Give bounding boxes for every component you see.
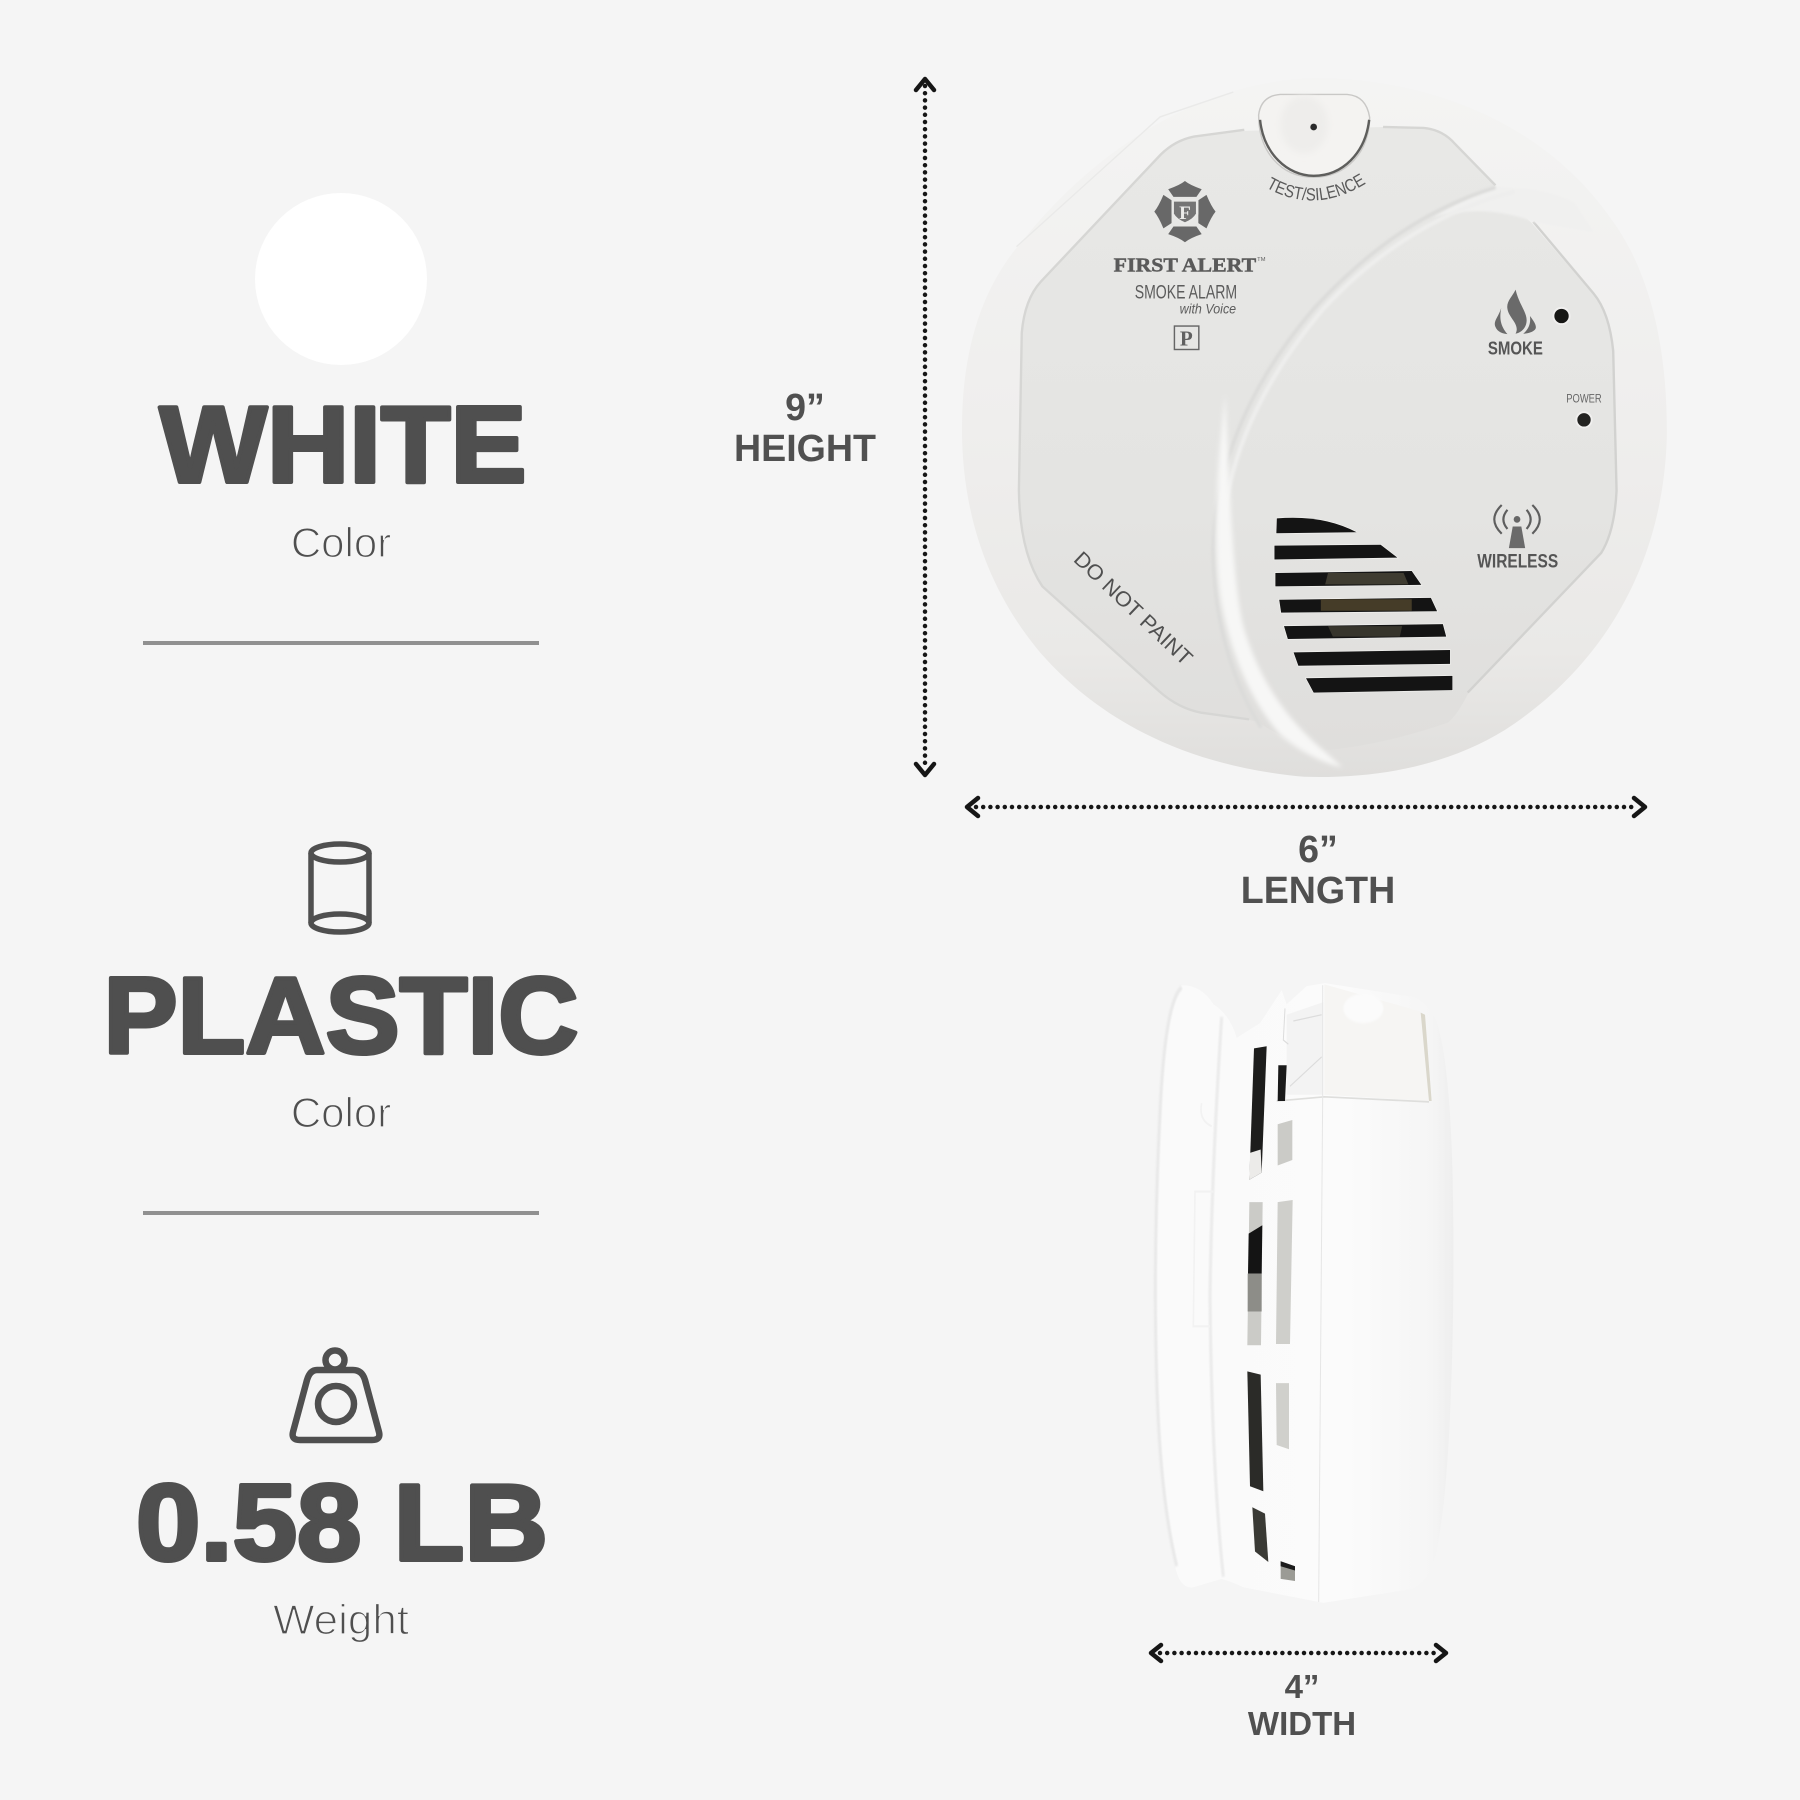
flange groove [1210, 1017, 1223, 1577]
side body silhouette [1153, 983, 1453, 1603]
panel: material spec [104, 844, 578, 1215]
dimension: length [967, 798, 1645, 911]
label: smoke: SMOKE [1488, 339, 1543, 359]
indicator: power led [1576, 412, 1592, 427]
label: color: Color [291, 1089, 391, 1136]
with voice: with Voice [1180, 302, 1236, 317]
button metal ring [1260, 120, 1369, 176]
icon: weight [293, 1350, 379, 1440]
flange tab [1193, 1103, 1213, 1326]
icon: flame [1495, 290, 1536, 334]
rim parting line [1017, 92, 1233, 247]
indicator: smoke led [1553, 308, 1570, 324]
plate groove: left [1019, 130, 1249, 719]
product name: SMOKE ALARM [1135, 282, 1237, 303]
heading: plastic: PLASTIC [104, 955, 578, 1077]
label: wireless: WIRELESS [1477, 552, 1558, 573]
button dot [1310, 124, 1317, 130]
label: power: POWER [1566, 392, 1602, 406]
label: length: LENGTH [1241, 869, 1395, 911]
heading: weight value: 0.58 LB [136, 1462, 548, 1584]
label: width: WIDTH [1248, 1705, 1356, 1742]
icon: wireless [1494, 505, 1540, 548]
certification mark: P [1180, 327, 1193, 351]
alarm outer housing [962, 78, 1667, 777]
top right rim wedge [1433, 186, 1594, 232]
label: height value: 9” [785, 386, 825, 428]
vent openings [1247, 1046, 1295, 1581]
top button block [1324, 984, 1429, 1101]
swoosh ridge highlight: upper [1224, 192, 1515, 519]
label: color: Color [291, 519, 391, 566]
panel: weight spec [136, 1350, 548, 1643]
main face plate [1020, 127, 1616, 751]
block shadow line [1277, 1097, 1429, 1102]
top clips [1287, 1002, 1323, 1095]
body seam [1319, 985, 1323, 1602]
arrow: length [967, 798, 1645, 816]
label: length value: 6” [1298, 828, 1338, 870]
heading: white: WHITE [160, 384, 526, 506]
button [1259, 94, 1370, 177]
top dimple [1343, 994, 1383, 1023]
dimension: height [734, 79, 934, 775]
arrow: height [916, 79, 934, 775]
label: height: HEIGHT [734, 427, 876, 469]
icon: white color swatch [255, 193, 427, 365]
label: weight: Weight [273, 1596, 409, 1643]
label: do not paint: DO NOT PAINT [1069, 547, 1197, 670]
swoosh ridge shadow [1213, 187, 1495, 728]
divider [143, 641, 539, 645]
trademark: TM [1257, 257, 1266, 263]
panel: color spec [143, 193, 539, 645]
label: width value: 4” [1285, 1668, 1319, 1705]
certification mark [1174, 326, 1199, 351]
product photo: alarm side view [1153, 983, 1453, 1603]
product photo: alarm front view [962, 92, 1666, 777]
brand name: FIRST ALERT [1114, 255, 1256, 276]
sensor grille [1274, 518, 1452, 693]
mounting flange shading [1155, 987, 1182, 1566]
swoosh ridge highlight: lower [1216, 395, 1342, 767]
logo: first alert shield: F [1179, 203, 1191, 224]
icon: cylinder [311, 844, 369, 932]
sensor chamber behind slats [1321, 573, 1412, 637]
arrow: width [1151, 1645, 1446, 1661]
dimension: width [1151, 1645, 1446, 1742]
plate groove: right [1468, 222, 1617, 693]
divider [143, 1211, 539, 1215]
logo: first alert shield [1154, 181, 1216, 242]
block right edge [1421, 1013, 1432, 1101]
button dimple [1280, 96, 1328, 153]
plate groove: top right [1383, 127, 1495, 185]
top clip facets [1283, 1008, 1322, 1086]
label: test/silence: TEST/SILENCE [1269, 173, 1366, 201]
